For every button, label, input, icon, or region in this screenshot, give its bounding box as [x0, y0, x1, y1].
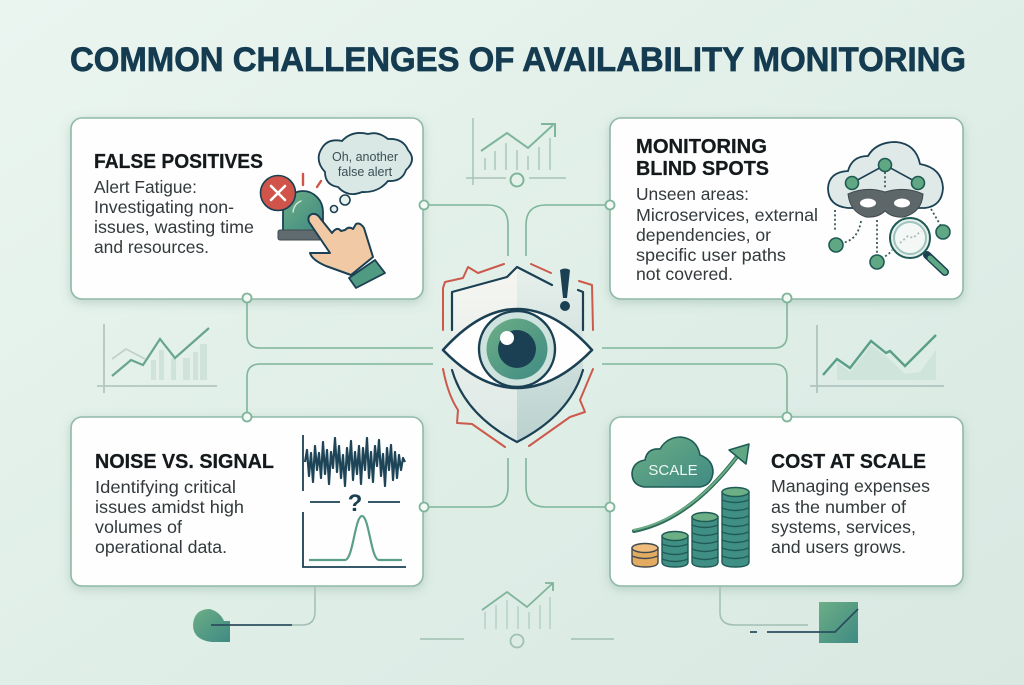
text: noise vs. signal description: volumes of: [95, 517, 182, 537]
text: noise vs. signal description: Identifying critical: [95, 477, 236, 497]
chart: left decorative: [97, 324, 217, 393]
text: false positives description: [94, 177, 254, 257]
icon: scale cloud, growth arrow and coin stacks: SCALE: [648, 462, 698, 479]
text: cost at scale description: Managing expenses: [771, 476, 930, 496]
heading: monitoring blind spots: BLIND SPOTS: [636, 158, 769, 180]
text: cost at scale description: systems, services,: [771, 517, 916, 537]
chart: right decorative: [810, 325, 944, 393]
decoration: bottom right connector: [720, 586, 858, 643]
panel: monitoring blind spots: [610, 118, 963, 299]
shield: [452, 267, 583, 442]
eye: [443, 309, 592, 388]
heading: monitoring blind spots: MONITORING: [636, 136, 767, 158]
central icon: eye on shield: [443, 264, 593, 447]
red outline: [443, 264, 593, 447]
text: false positives description: Investigating non-: [94, 197, 234, 217]
icon: masked cloud network with magnifier: [828, 142, 950, 272]
title: COMMON CHALLENGES OF AVAILABILITY MONITORING: [70, 41, 966, 79]
exclamation mark: [560, 268, 570, 311]
text: noise vs. signal description: issues amidst high: [95, 497, 244, 517]
text: false positives description: Alert Fatigue:: [94, 177, 197, 197]
text: cost at scale description: as the number of: [771, 497, 906, 517]
decoration: bottom left connector: [193, 586, 315, 642]
heading: false positives: FALSE POSITIVES: [94, 151, 263, 173]
text: false positives description: issues, wasting time: [94, 217, 254, 237]
thought bubble: [319, 133, 412, 212]
text: monitoring blind spots description: specific user paths: [636, 245, 786, 265]
panel: cost at scale: [610, 417, 963, 586]
text: false positives description: and resources.: [94, 237, 209, 257]
chart: noisy waveform and clear signal: [303, 435, 406, 567]
thought bubble: Oh, another: [332, 150, 398, 164]
text: monitoring blind spots description: Unseen areas:: [636, 184, 749, 204]
coin stack 1: [632, 544, 658, 567]
heading: cost at scale: COST AT SCALE: [771, 451, 926, 473]
coin stack 3: [692, 512, 718, 567]
chart: noisy waveform and clear signal: ?: [348, 490, 362, 517]
heading: noise vs. signal: NOISE VS. SIGNAL: [95, 451, 274, 473]
text: noise vs. signal description: operational data.: [95, 537, 227, 557]
connector nodes: [242, 200, 792, 512]
coin stack 2: [662, 532, 688, 567]
coin stack 4: [722, 488, 749, 567]
chart: top centre decorative: [466, 118, 566, 186]
text: cost at scale description: and users grows.: [771, 537, 906, 557]
text: cost at scale description: [771, 476, 930, 557]
text: monitoring blind spots description: Microservices, external: [636, 205, 818, 225]
heading: monitoring blind spots: [636, 136, 769, 180]
text: monitoring blind spots description: not covered.: [636, 264, 733, 284]
text: noise vs. signal description: [95, 477, 244, 557]
panel: noise vs. signal: [71, 417, 423, 586]
thought bubble: false alert: [338, 165, 393, 179]
text: monitoring blind spots description: dependencies, or: [636, 225, 771, 245]
connector lines: [247, 205, 787, 507]
icon: scale cloud, growth arrow and coin stacks: [632, 437, 749, 567]
text: monitoring blind spots description: [636, 184, 818, 284]
icon: alarm button pressed by hand: [260, 133, 412, 288]
chart: bottom centre decorative: [420, 583, 614, 648]
panel: false positives: [71, 118, 423, 299]
